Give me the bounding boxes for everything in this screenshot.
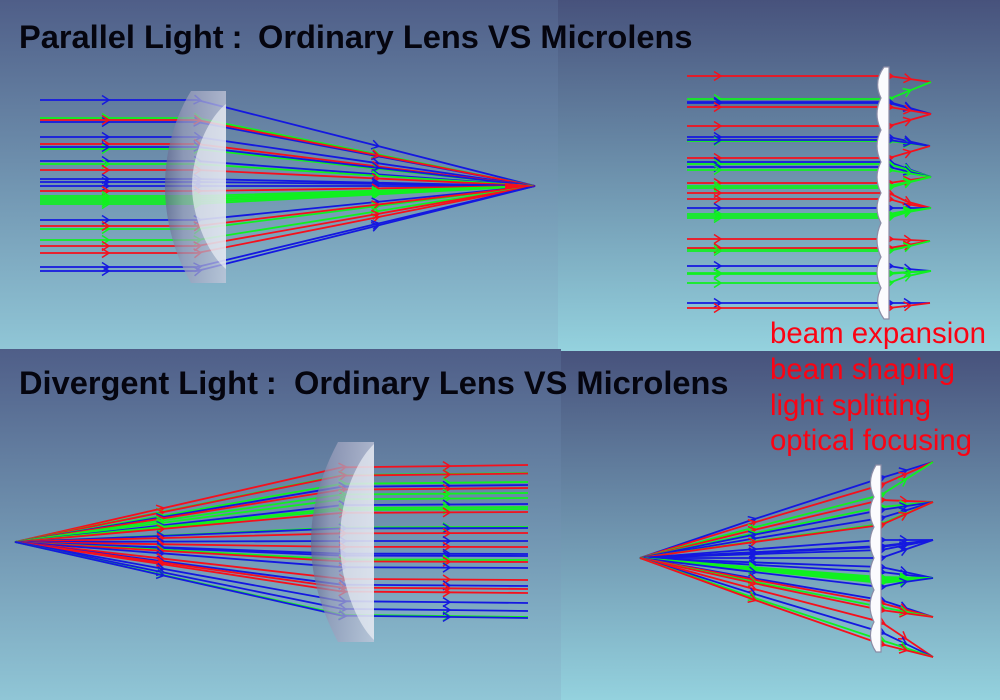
panel: parallel light, microlens — [558, 0, 1000, 351]
ray trace: parallel rays converging through ordinary lens — [40, 100, 536, 271]
panel: parallel light, ordinary lens — [0, 0, 558, 349]
text block: microlens applications: beam expansion — [770, 317, 986, 350]
title: parallel light: Ordinary Lens VS Microlens — [258, 18, 693, 55]
text block: microlens applications: light splitting — [770, 389, 931, 422]
ray trace: parallel rays through microlens array — [687, 76, 931, 308]
icon: microlens array — [877, 67, 889, 319]
ray trace: divergent rays through microlens array — [640, 462, 933, 657]
title: divergent light: Ordinary Lens VS Microlens — [294, 364, 729, 401]
text block: microlens applications: optical focusing — [770, 424, 972, 457]
title: parallel light: Parallel Light: — [19, 18, 242, 55]
ray trace: divergent rays collimated by ordinary lens — [15, 465, 528, 618]
icon: microlens array — [870, 465, 881, 652]
icon: ordinary plano-convex lens — [165, 91, 226, 283]
text block: microlens applications: beam shaping — [770, 353, 955, 386]
panel: divergent light, ordinary lens — [0, 349, 561, 700]
panel: divergent light, microlens — [561, 351, 1000, 700]
title: divergent light: Divergent Light: — [19, 364, 277, 401]
text block: microlens applications — [770, 317, 986, 457]
icon: ordinary plano-convex lens — [311, 442, 374, 642]
